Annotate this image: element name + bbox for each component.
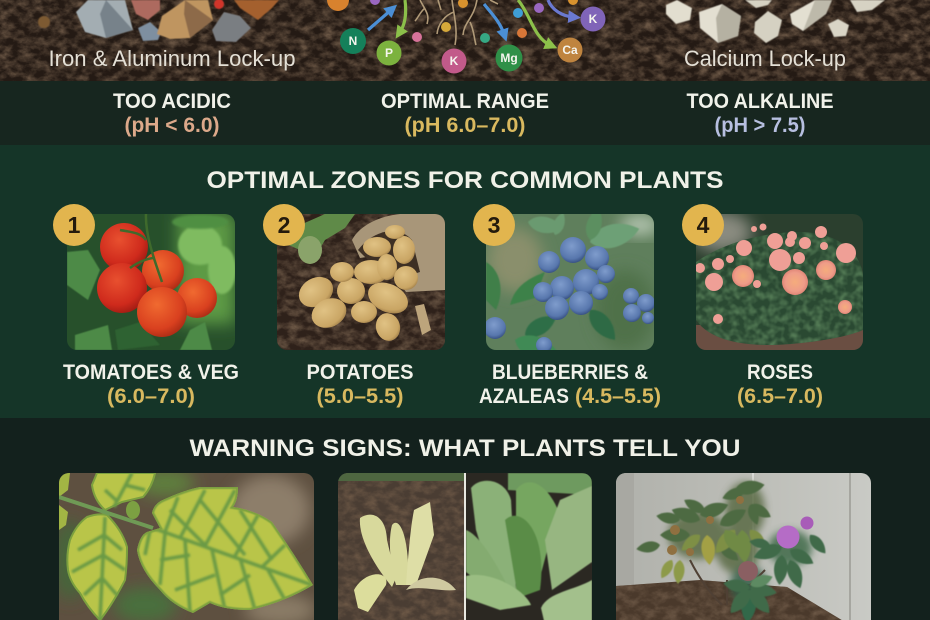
badge 4: 4	[697, 212, 710, 238]
label: tomatoes and veg	[63, 361, 239, 408]
optimal range value: (pH 6.0–7.0)	[404, 114, 526, 137]
label: blueberries and azaleas: BLUEBERRIES &	[492, 361, 648, 384]
label: iron and aluminum lock-up: Iron & Aluminum Lock-up	[48, 46, 296, 71]
big leaf	[137, 487, 313, 613]
label: roses	[737, 361, 823, 408]
panel: soil cross-section	[0, 0, 930, 81]
icon: nutrients and roots	[327, 0, 606, 74]
heading: optimal zones: OPTIMAL ZONES FOR COMMON PLANTS	[206, 167, 724, 194]
icon: calcium rocks	[666, 0, 885, 43]
nutrient K purple	[580, 6, 606, 32]
heading: warning signs: WARNING SIGNS: WHAT PLANTS TELL YOU	[190, 435, 740, 462]
badge 3	[473, 204, 515, 246]
nutrient Mg	[496, 44, 522, 72]
nutrient Ca: Ca	[562, 43, 578, 57]
label: roses: ROSES	[747, 361, 813, 384]
badge 1: 1	[68, 212, 81, 238]
nutrient N	[340, 28, 366, 54]
photo: potatoes	[277, 214, 445, 350]
photo: chlorotic leaf	[52, 469, 320, 620]
top leaf	[92, 473, 155, 510]
nutrient N: N	[349, 34, 357, 48]
badge 4	[682, 204, 724, 246]
photo: shrub by concrete wall	[616, 473, 871, 620]
nutrient K pink	[442, 48, 466, 74]
label: calcium lock-up: Calcium Lock-up	[684, 46, 846, 71]
label: potatoes: POTATOES	[306, 361, 414, 384]
label: roses: (6.5–7.0)	[737, 385, 823, 408]
photo: tomatoes	[67, 214, 236, 350]
optimal range label: OPTIMAL RANGE	[381, 90, 549, 113]
nutrient K pink: K	[450, 54, 459, 68]
badge 2	[263, 204, 305, 246]
label: potatoes: (5.0–5.5)	[316, 385, 404, 408]
label: blueberries and azaleas	[479, 361, 661, 408]
nutrient P	[376, 40, 402, 66]
nutrient Mg: Mg	[500, 51, 518, 65]
label: tomatoes and veg: (6.0–7.0)	[107, 385, 195, 408]
icon: iron and aluminum rocks	[38, 0, 279, 42]
label: blueberries and azaleas: AZALEAS	[479, 385, 569, 408]
panel: optimal zones background	[0, 145, 930, 418]
photo: blueberries	[486, 214, 654, 350]
too alkaline range: (pH > 7.5)	[714, 114, 806, 137]
nutrient K purple: K	[589, 12, 598, 26]
photo: roses	[692, 212, 863, 350]
shrub mass	[635, 478, 830, 620]
label: tomatoes and veg: TOMATOES & VEG	[63, 361, 239, 384]
too acidic range: (pH < 6.0)	[124, 114, 220, 137]
nutrient Ca	[558, 38, 582, 62]
badge 2: 2	[278, 212, 290, 238]
badge 3: 3	[488, 212, 500, 238]
lower leaf	[67, 514, 127, 620]
badge 1	[53, 204, 95, 246]
label: potatoes	[306, 361, 414, 408]
photo: sick and healthy lettuce	[338, 473, 592, 620]
label: blueberries and azaleas: (4.5–5.5)	[575, 385, 661, 408]
panel: pH ranges	[0, 81, 930, 145]
too alkaline label: TOO ALKALINE	[686, 90, 834, 113]
too acidic label: TOO ACIDIC	[113, 90, 231, 113]
nutrient P: P	[385, 46, 393, 60]
